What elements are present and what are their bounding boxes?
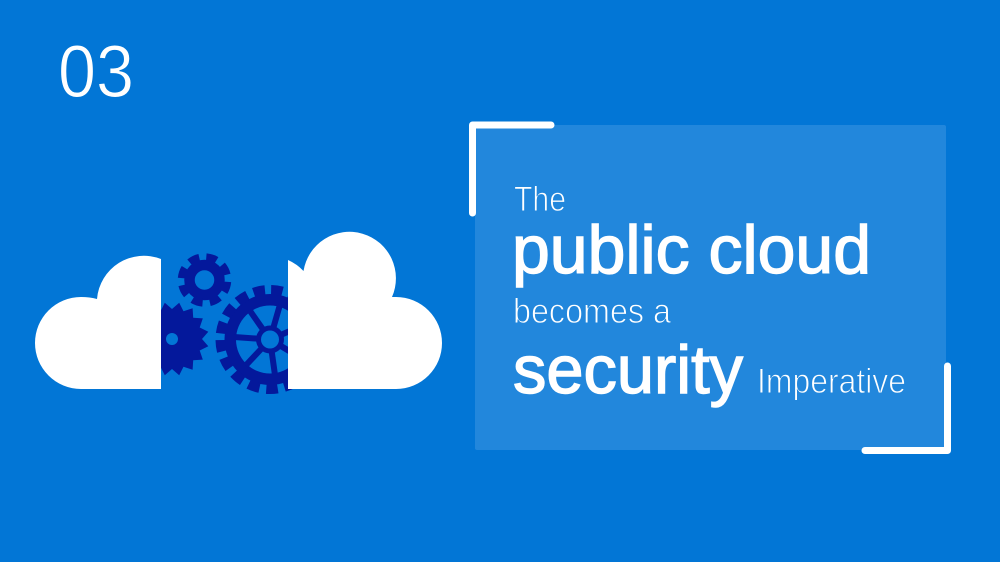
text: becomes a: becomes a xyxy=(513,292,671,331)
icon: right half of cloud xyxy=(288,232,442,389)
icon: left half of cloud xyxy=(35,256,161,389)
text: security: security xyxy=(513,332,743,408)
headline text xyxy=(512,180,906,408)
bracket: bottom right xyxy=(865,366,948,450)
text: Imperative: Imperative xyxy=(757,362,906,401)
text: The: The xyxy=(514,180,566,219)
text: public cloud: public cloud xyxy=(512,212,871,288)
icon: cloud with gears xyxy=(35,232,442,390)
icon: small top gear xyxy=(180,256,229,304)
bracket: top left xyxy=(472,125,551,213)
section number: 03 xyxy=(58,30,134,113)
panel: headline background xyxy=(475,125,946,450)
icon: saw-tooth middle gear xyxy=(136,303,208,375)
icon: large spoked gear xyxy=(219,289,321,390)
